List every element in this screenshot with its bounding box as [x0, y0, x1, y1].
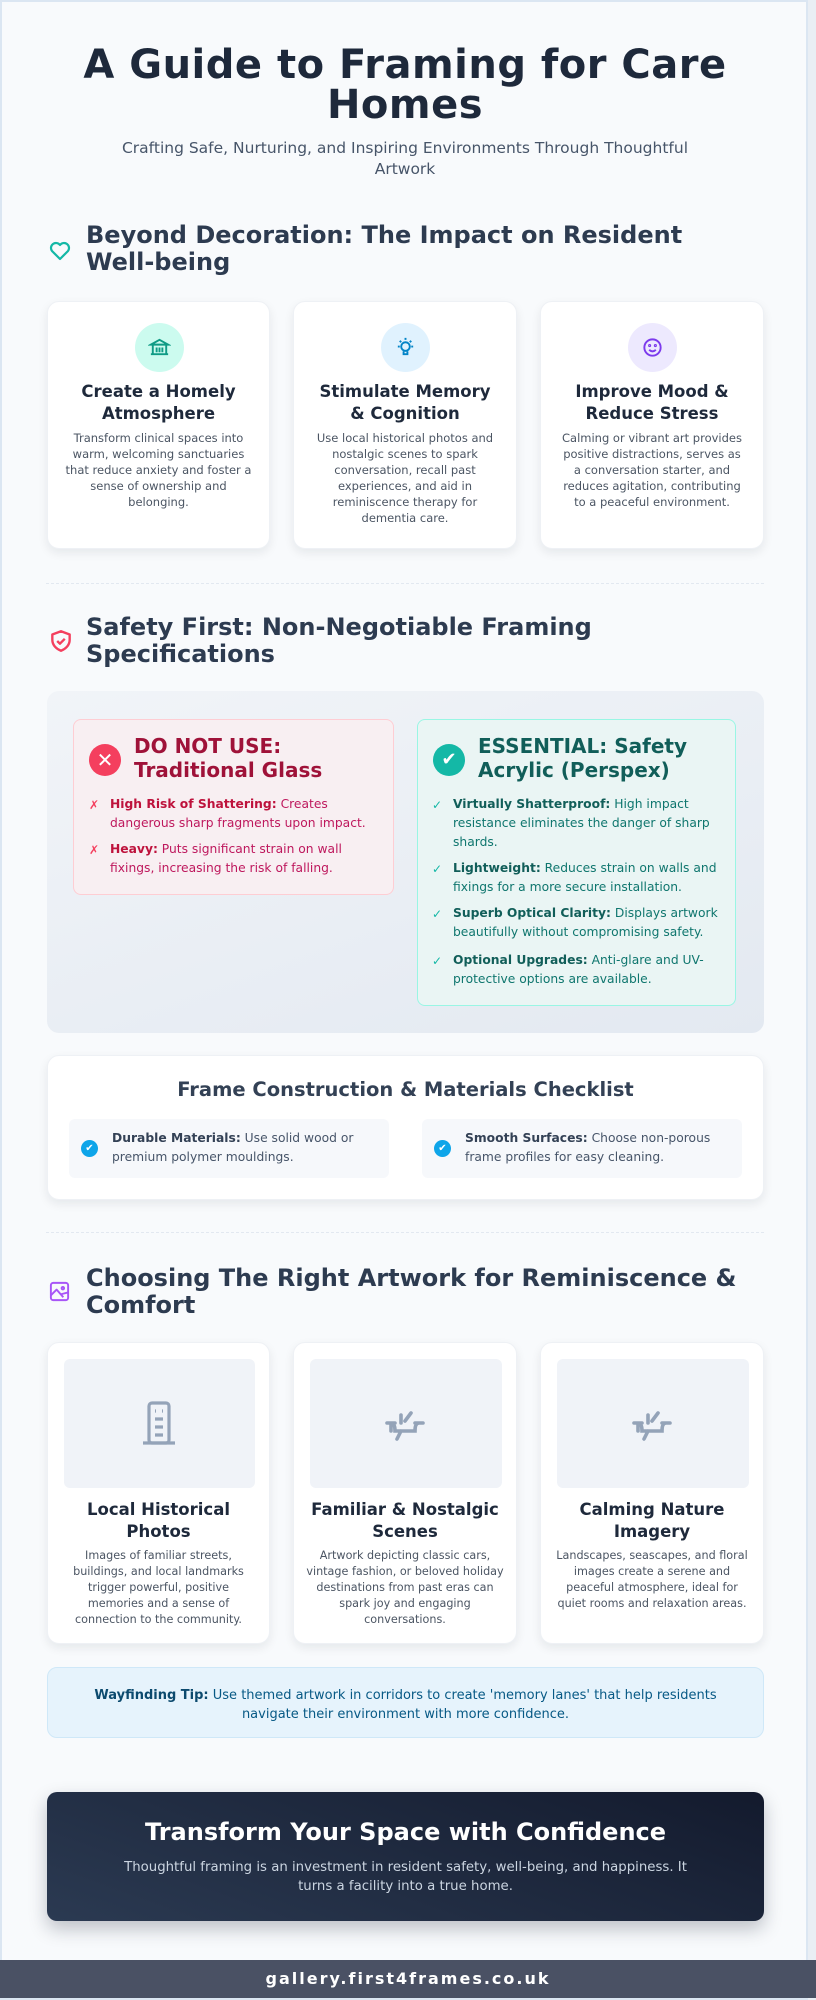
panel: essential acrylic: Lightweight: Reduces strain on walls and fixings for a more secure installation. — [453, 861, 717, 894]
card: homely atmosphere: Create a Homely — [81, 382, 236, 401]
checklist item: smooth: Smooth Surfaces: Choose non-porous frame profiles for easy cleaning. — [465, 1131, 710, 1164]
card: local historical photos: Local Historical — [87, 1500, 230, 1519]
panel: essential acrylic: ✓ — [432, 954, 442, 968]
checklist item: smooth — [422, 1119, 742, 1178]
card: nostalgic scenes: Artwork depicting classic cars, vintage fashion, or beloved holiday destinations from past eras can spark joy and engaging conversations. — [306, 1549, 504, 1626]
panel: do not use glass: Traditional Glass — [134, 758, 322, 782]
icon: heart — [50, 242, 70, 260]
card: mood — [540, 301, 764, 549]
icon: building placeholder — [64, 1359, 255, 1488]
icon: x circle — [89, 744, 121, 776]
panel: essential acrylic — [417, 719, 736, 1006]
panel: do not use glass: ✗ — [89, 843, 99, 857]
heading: choosing artwork: Choosing The Right Artwork for Reminiscence & Comfort — [86, 1264, 736, 1319]
panel: call to action: Thoughtful framing is an investment in resident safety, well-being, and happiness. It turns a facility into a true home. — [124, 1860, 687, 1894]
panel: essential acrylic: ✓ — [432, 907, 442, 921]
panel: essential acrylic: ✓ — [432, 798, 442, 812]
icon: sofa placeholder — [557, 1359, 749, 1488]
title: A Guide to Framing for Care Homes — [83, 42, 727, 128]
card: nature imagery: Landscapes, seascapes, and floral images create a serene and peaceful atmosphere, ideal for quiet rooms and relaxation areas. — [556, 1549, 748, 1610]
card: memory — [293, 301, 517, 549]
panel: do not use glass — [73, 719, 394, 895]
checklist item: durable — [69, 1119, 389, 1178]
card: mood: Reduce Stress — [586, 404, 718, 423]
card: homely atmosphere — [47, 301, 270, 549]
callout: wayfinding tip — [47, 1667, 764, 1738]
card: memory: Use local historical photos and nostalgic scenes to spark conversation, recall past experiences, and aid in reminiscence therapy for dementia care. — [317, 431, 493, 525]
icon: building — [135, 323, 184, 372]
card: memory: & Cognition — [350, 404, 460, 423]
subtitle: Crafting Safe, Nurturing, and Inspiring Environments Through Thoughtful Artwork — [122, 139, 688, 178]
panel: essential acrylic: Optional Upgrades: Anti-glare and UV-protective options are available. — [453, 953, 704, 986]
panel: essential acrylic: Virtually Shatterproof: High impact resistance eliminates the danger of sharp shards. — [453, 797, 710, 849]
card: local historical photos: Photos — [126, 1522, 191, 1541]
card: nostalgic scenes: Scenes — [372, 1522, 438, 1541]
heading: beyond decoration: Beyond Decoration: The Impact on Resident Well-being — [86, 221, 682, 276]
callout: wayfinding tip: Wayfinding Tip: Use themed artwork in corridors to create 'memory lanes' that help residents navigate their environment with more confidence. — [94, 1688, 717, 1722]
icon: shield — [51, 630, 71, 652]
panel: call to action — [47, 1792, 764, 1921]
checklist item: durable: ✔ — [85, 1143, 94, 1154]
panel: do not use glass: DO NOT USE: — [134, 734, 281, 758]
panel: safety specs — [47, 691, 764, 1033]
panel: essential acrylic: ✓ — [432, 862, 442, 876]
panel: checklist: Frame Construction & Materials Checklist — [177, 1078, 634, 1101]
panel: checklist — [47, 1055, 764, 1200]
card: local historical photos: Images of familiar streets, buildings, and local landmarks trigger powerful, positive memories and a sense of connection to the community. — [73, 1549, 244, 1626]
panel: do not use glass: High Risk of Shattering: Creates dangerous sharp fragments upon impact. — [110, 797, 366, 830]
icon: lightbulb — [381, 323, 430, 372]
panel: essential acrylic: Superb Optical Clarity: Displays artwork beautifully without compromising safety. — [453, 906, 718, 939]
card: mood: Calming or vibrant art provides positive distractions, serves as a conversation starter, and reduces agitation, contributing to a peaceful environment. — [562, 431, 742, 509]
icon: x circle: ✕ — [97, 748, 113, 772]
icon: smile — [628, 323, 677, 372]
checklist item: durable: Durable Materials: Use solid wood or premium polymer mouldings. — [112, 1131, 353, 1164]
panel: essential acrylic: Acrylic (Perspex) — [478, 758, 670, 782]
icon: check circle — [433, 744, 465, 776]
checklist item: smooth: ✔ — [438, 1143, 447, 1154]
card: nature imagery — [540, 1342, 764, 1644]
card: memory: Stimulate Memory — [319, 382, 490, 401]
icon: image — [50, 1282, 70, 1302]
card: nostalgic scenes — [293, 1342, 517, 1644]
icon: check circle: ✔ — [441, 749, 457, 770]
panel: do not use glass: ✗ — [89, 798, 99, 812]
card: homely atmosphere: Transform clinical spaces into warm, welcoming sanctuaries that reduce anxiety and foster a sense of ownership and belonging. — [66, 431, 251, 509]
card: nostalgic scenes: Familiar & Nostalgic — [311, 1500, 499, 1519]
panel: essential acrylic: ESSENTIAL: Safety — [478, 734, 687, 758]
footer: gallery.first4frames.co.uk — [266, 1969, 550, 1988]
heading: safety first: Safety First: Non-Negotiable Framing Specifications — [86, 613, 592, 668]
card: nature imagery: Imagery — [614, 1522, 690, 1541]
panel: do not use glass: Heavy: Puts significant strain on wall fixings, increasing the risk of falling. — [110, 842, 342, 875]
footer — [0, 1960, 816, 1998]
card: mood: Improve Mood & — [575, 382, 729, 401]
card: nature imagery: Calming Nature — [580, 1500, 724, 1519]
card: homely atmosphere: Atmosphere — [102, 404, 215, 423]
card: local historical photos — [47, 1342, 270, 1644]
icon: sofa placeholder — [310, 1359, 502, 1488]
panel: call to action: Transform Your Space with Confidence — [145, 1818, 666, 1846]
